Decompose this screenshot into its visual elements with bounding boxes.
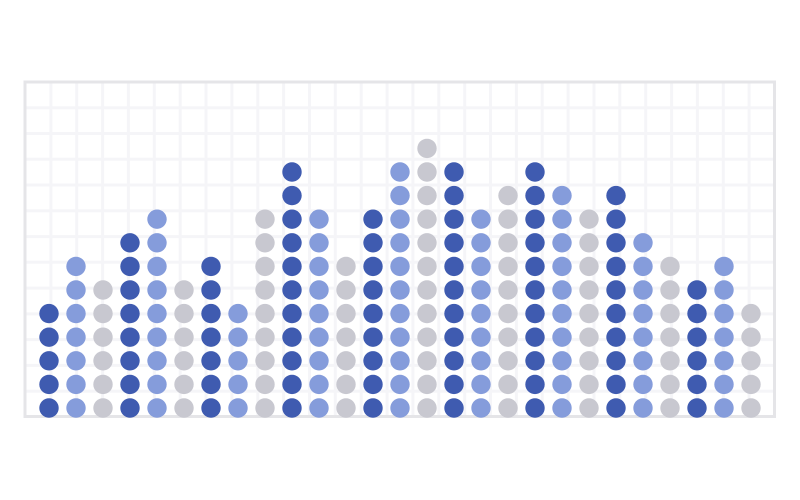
column 19	[525, 162, 545, 418]
dot columns	[39, 139, 761, 418]
column 16	[444, 162, 464, 418]
column 8	[228, 304, 248, 418]
column 25	[687, 280, 707, 418]
column 6	[174, 280, 194, 418]
column 5	[147, 210, 167, 418]
column 11	[309, 210, 329, 418]
column 10	[282, 162, 302, 418]
column 7	[201, 257, 221, 418]
column 17	[471, 210, 491, 418]
column 15	[417, 139, 437, 418]
column 3	[93, 280, 113, 418]
column 20	[552, 186, 572, 418]
column 9	[255, 210, 275, 418]
column 24	[660, 257, 680, 418]
column 26	[714, 257, 734, 418]
column 2	[66, 257, 86, 418]
chart frame	[25, 82, 774, 416]
column 14	[390, 162, 410, 418]
column 27	[741, 304, 761, 418]
column 21	[579, 210, 599, 418]
column 22	[606, 186, 626, 418]
column 13	[363, 210, 383, 418]
column 18	[498, 186, 518, 418]
column 23	[633, 233, 653, 418]
column 4	[120, 233, 140, 418]
column 1	[39, 304, 59, 418]
column 12	[336, 257, 356, 418]
